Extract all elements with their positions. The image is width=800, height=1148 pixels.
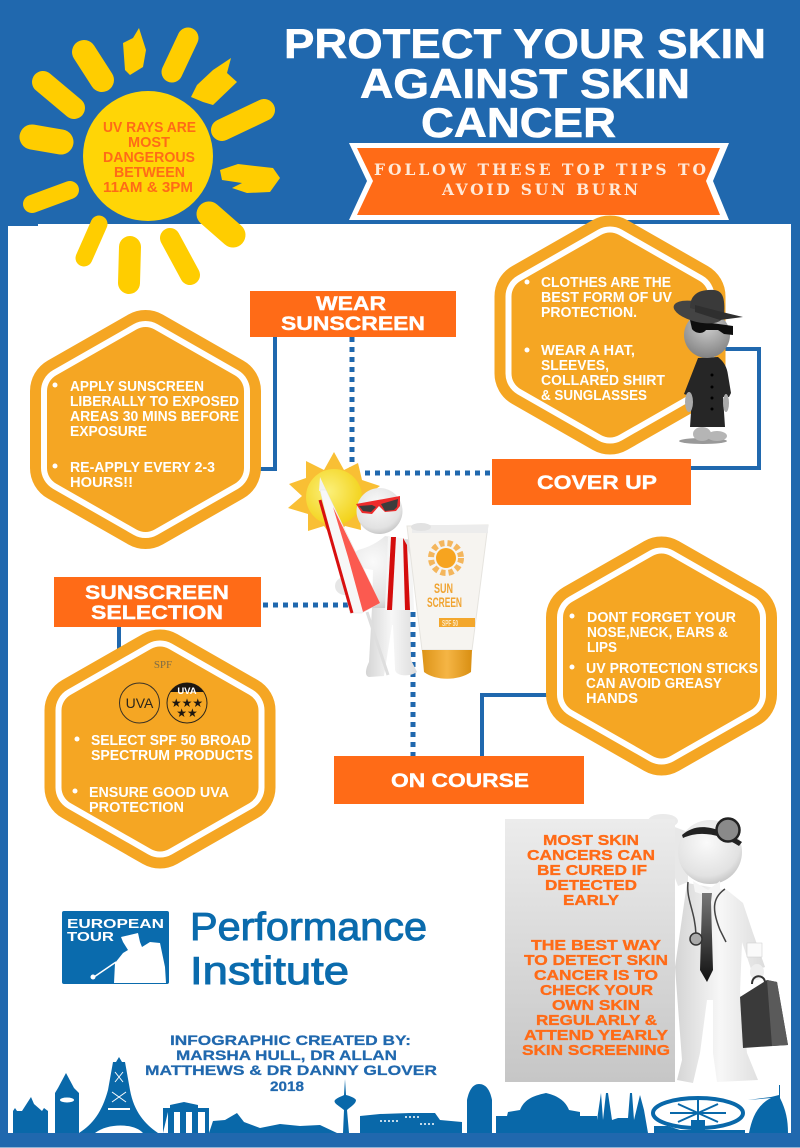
sun message: UV RAYS ARE <box>103 119 196 136</box>
domed building <box>496 1093 597 1133</box>
sunscreen tube: SUN <box>434 580 453 596</box>
board text: THE BEST WAY <box>531 937 661 954</box>
credits: MATTHEWS & DR DANNY GLOVER <box>145 1062 437 1078</box>
sun message: MOST <box>128 134 170 151</box>
board text: SKIN SCREENING <box>522 1042 670 1059</box>
logo wordmark: Institute <box>190 950 349 993</box>
spired cathedral <box>597 1093 648 1133</box>
board text: CANCERS CAN <box>527 847 655 864</box>
board text: MOST SKIN <box>543 832 639 849</box>
panel: on course hexagon: LIPS <box>587 640 617 656</box>
sun illustration with UV message <box>32 28 280 283</box>
logo mark: TOUR <box>67 929 115 944</box>
monument <box>163 1102 209 1133</box>
icon: SPF UVA badges: UVA <box>126 695 154 711</box>
jagged sun rays <box>123 28 280 193</box>
sail hotel <box>748 1085 788 1133</box>
sunscreen tube <box>407 523 488 679</box>
icon: SPF UVA badges: ★★★ <box>171 696 203 710</box>
sun message: DANGEROUS <box>103 149 195 166</box>
credits: INFOGRAPHIC CREATED BY: <box>170 1032 411 1048</box>
label: on course <box>334 756 584 804</box>
panel: apply sunscreen hexagon: AREAS 30 MINS BEFORE <box>70 409 239 425</box>
panel: clothes hexagon: PROTECTION. <box>541 305 637 321</box>
panel: on course hexagon: NOSE,NECK, EARS & <box>587 625 728 641</box>
sun rays <box>32 38 264 283</box>
label: wear sunscreen: WEAR <box>316 294 386 315</box>
sun message: 11AM & 3PM <box>103 179 193 196</box>
skyline <box>13 1057 788 1133</box>
panel: on course hexagon <box>570 572 758 740</box>
logo wordmark <box>190 906 427 993</box>
logo mark: EUROPEAN <box>67 916 164 931</box>
panel: clothes hexagon: WEAR A HAT, <box>541 343 635 359</box>
label: cover up <box>492 459 691 505</box>
connector lines <box>119 337 759 756</box>
bottom band <box>0 1133 800 1148</box>
board text: CHECK YOUR <box>540 982 653 999</box>
panel: clothes hexagon: SLEEVES, <box>541 358 609 374</box>
board text: TO DETECT SKIN <box>524 952 668 969</box>
icon: SPF UVA badges <box>120 659 207 723</box>
board text: OWN SKIN <box>552 997 640 1014</box>
sun message: BETWEEN <box>114 164 185 181</box>
board text: CANCER IS TO <box>534 967 658 984</box>
title: AGAINST SKIN <box>360 60 690 107</box>
label: wear sunscreen: SUNSCREEN <box>281 314 425 335</box>
panel: apply sunscreen hexagon: HOURS!! <box>70 475 133 491</box>
title <box>284 20 766 146</box>
panel: clothes hexagon: COLLARED SHIRT <box>541 373 665 389</box>
logo wordmark: Performance <box>190 906 427 949</box>
long building <box>360 1113 462 1133</box>
sun disc <box>83 91 213 221</box>
panel: SPF selection hexagon <box>72 659 253 834</box>
red sunglasses <box>356 496 400 514</box>
panel: SPF selection hexagon: PROTECTION <box>89 800 184 816</box>
subtitle ribbon: FOLLOW THESE TOP TIPS TO <box>374 160 706 179</box>
icon: SPF UVA badges: UVA <box>177 686 197 697</box>
Eiffel Tower <box>79 1057 158 1133</box>
white content panel <box>8 224 791 1133</box>
label: sunscreen selection: SUNSCREEN <box>85 583 229 604</box>
panel: clothes hexagon <box>524 250 690 420</box>
label: wear sunscreen <box>250 291 456 337</box>
label: sunscreen selection: SELECTION <box>91 603 223 624</box>
subtitle ribbon <box>349 143 729 220</box>
panel: apply sunscreen hexagon: EXPOSURE <box>70 424 147 440</box>
panel: SPF selection hexagon: SPECTRUM PRODUCTS <box>91 748 253 764</box>
panel: clothes hexagon: BEST FORM OF UV <box>541 290 672 306</box>
label: sunscreen selection <box>54 577 261 627</box>
board text <box>522 832 670 1059</box>
panel: apply sunscreen hexagon: APPLY SUNSCREEN <box>70 379 204 395</box>
observation tower <box>335 1079 356 1133</box>
panel: on course hexagon: HANDS <box>586 691 638 707</box>
board text: REGULARLY & <box>536 1012 657 1029</box>
label: cover up: COVER UP <box>537 473 657 494</box>
panel: SPF selection hexagon: SELECT SPF 50 BROAD <box>91 733 251 749</box>
panel: clothes hexagon: & SUNGLASSES <box>541 388 647 404</box>
icon: man in hat and coat <box>671 290 743 444</box>
panel: apply sunscreen hexagon: LIBERALLY TO EXPOSED <box>70 394 239 410</box>
sunscreen tube: SPF 50 <box>442 619 458 628</box>
parasol <box>319 477 388 675</box>
sun message <box>103 119 196 196</box>
board text: ATTEND YEARLY <box>524 1027 668 1044</box>
logo mark <box>62 911 169 984</box>
opera house <box>209 1113 337 1133</box>
panel: skin check message board with doctor <box>505 814 788 1083</box>
icon: figure with parasol and sunscreen tube <box>288 452 488 679</box>
palm island <box>653 1098 745 1133</box>
striped towel <box>385 537 414 610</box>
church <box>13 1097 48 1133</box>
sun behind figure <box>288 452 380 540</box>
panel: clothes hexagon: CLOTHES ARE THE <box>541 275 671 291</box>
Big Ben <box>55 1073 79 1133</box>
message board <box>505 819 675 1082</box>
panel: SPF selection hexagon: ENSURE GOOD UVA <box>89 785 230 801</box>
credits <box>145 1032 437 1094</box>
panel: apply sunscreen hexagon: RE-APPLY EVERY 2-3 <box>70 460 215 476</box>
credits: 2018 <box>270 1078 304 1094</box>
icon: SPF UVA badges: SPF <box>154 659 172 671</box>
panel: on course hexagon: CAN AVOID GREASY <box>586 676 722 692</box>
title: PROTECT YOUR SKIN <box>284 20 766 67</box>
briefcase <box>740 964 788 1048</box>
figure body <box>335 488 417 677</box>
panel: on course hexagon: UV PROTECTION STICKS <box>586 661 758 677</box>
panel: apply sunscreen hexagon <box>52 345 239 514</box>
tall tower <box>467 1084 492 1133</box>
board text: DETECTED <box>545 877 637 894</box>
board text: EARLY <box>563 892 619 909</box>
logo: European Tour Performance Institute <box>62 906 427 993</box>
panel: on course hexagon: DONT FORGET YOUR <box>587 610 737 626</box>
icon: SPF UVA badges: ★★ <box>176 706 198 720</box>
board text: BE CURED IF <box>537 862 647 879</box>
subtitle ribbon: AVOID SUN BURN <box>441 180 638 199</box>
doctor figure <box>648 814 765 1083</box>
credits: MARSHA HULL, DR ALLAN <box>176 1047 397 1063</box>
sunscreen tube: SCREEN <box>427 594 462 610</box>
title: CANCER <box>421 99 616 146</box>
label: on course: ON COURSE <box>391 771 529 792</box>
